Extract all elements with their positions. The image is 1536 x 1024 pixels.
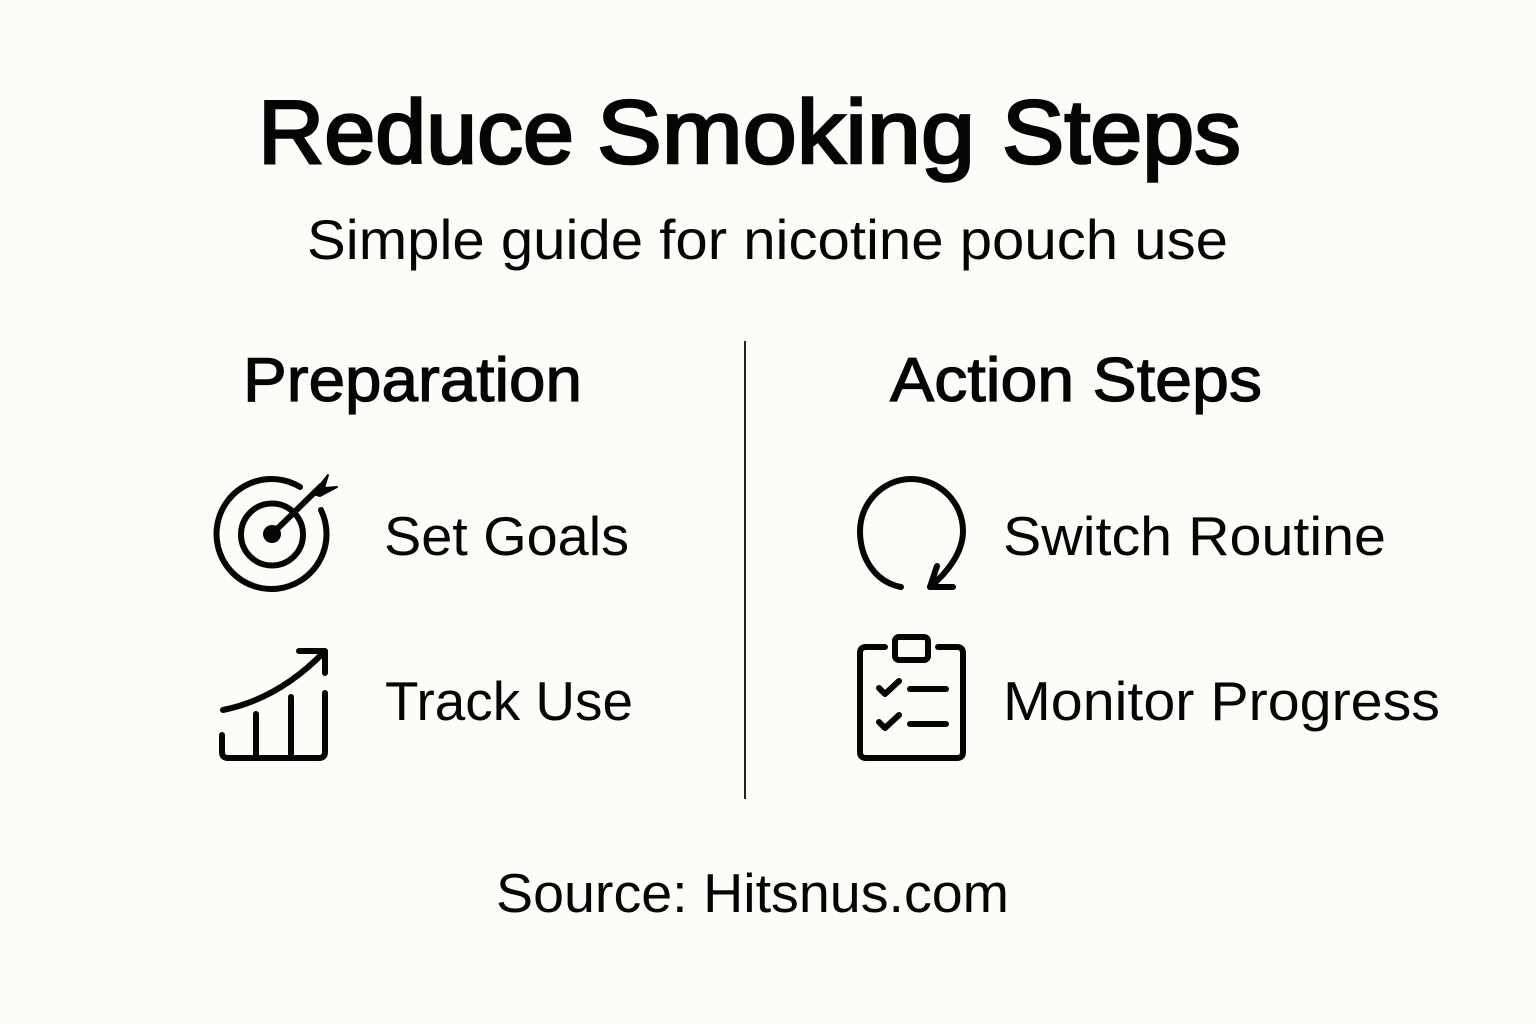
- title: [258, 83, 1241, 183]
- title: Reduce: [258, 83, 574, 183]
- label: set goals: Set Goals: [384, 505, 629, 567]
- label: monitor progress: Monitor Progress: [1003, 670, 1440, 732]
- title: Steps: [1002, 83, 1241, 183]
- title: Smoking: [597, 83, 975, 183]
- label: switch routine: Switch Routine: [1003, 505, 1386, 567]
- icon: growth chart: [222, 651, 325, 758]
- source: Source: Hitsnus.com: [496, 862, 1009, 924]
- icon: clipboard checklist: [860, 637, 963, 758]
- heading: action steps: Action Steps: [890, 346, 1262, 415]
- label: track use: Track Use: [385, 670, 633, 732]
- icon: target with arrow: [217, 475, 337, 589]
- icon: loop arrow: [860, 479, 963, 587]
- subtitle: Simple guide for nicotine pouch use: [307, 208, 1228, 271]
- heading: preparation: Preparation: [243, 346, 582, 415]
